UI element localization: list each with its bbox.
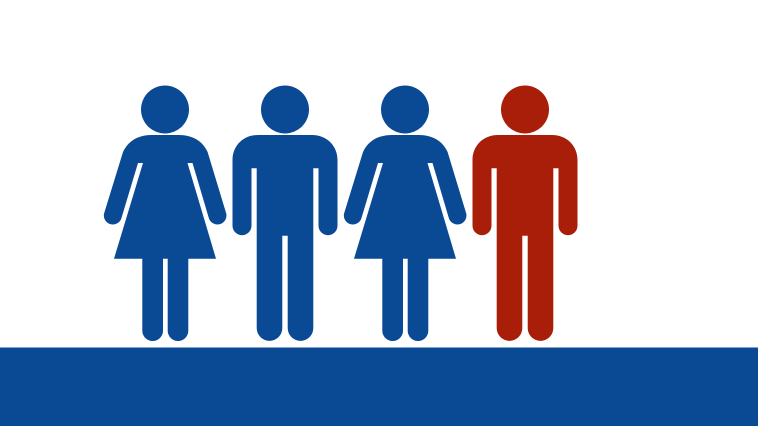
icon: red man bbox=[472, 86, 578, 341]
icon: blue woman 1 bbox=[104, 86, 226, 341]
blue ground band bbox=[0, 348, 758, 426]
icon: blue woman 2 bbox=[344, 86, 466, 341]
icon: blue man 1 bbox=[232, 86, 338, 341]
